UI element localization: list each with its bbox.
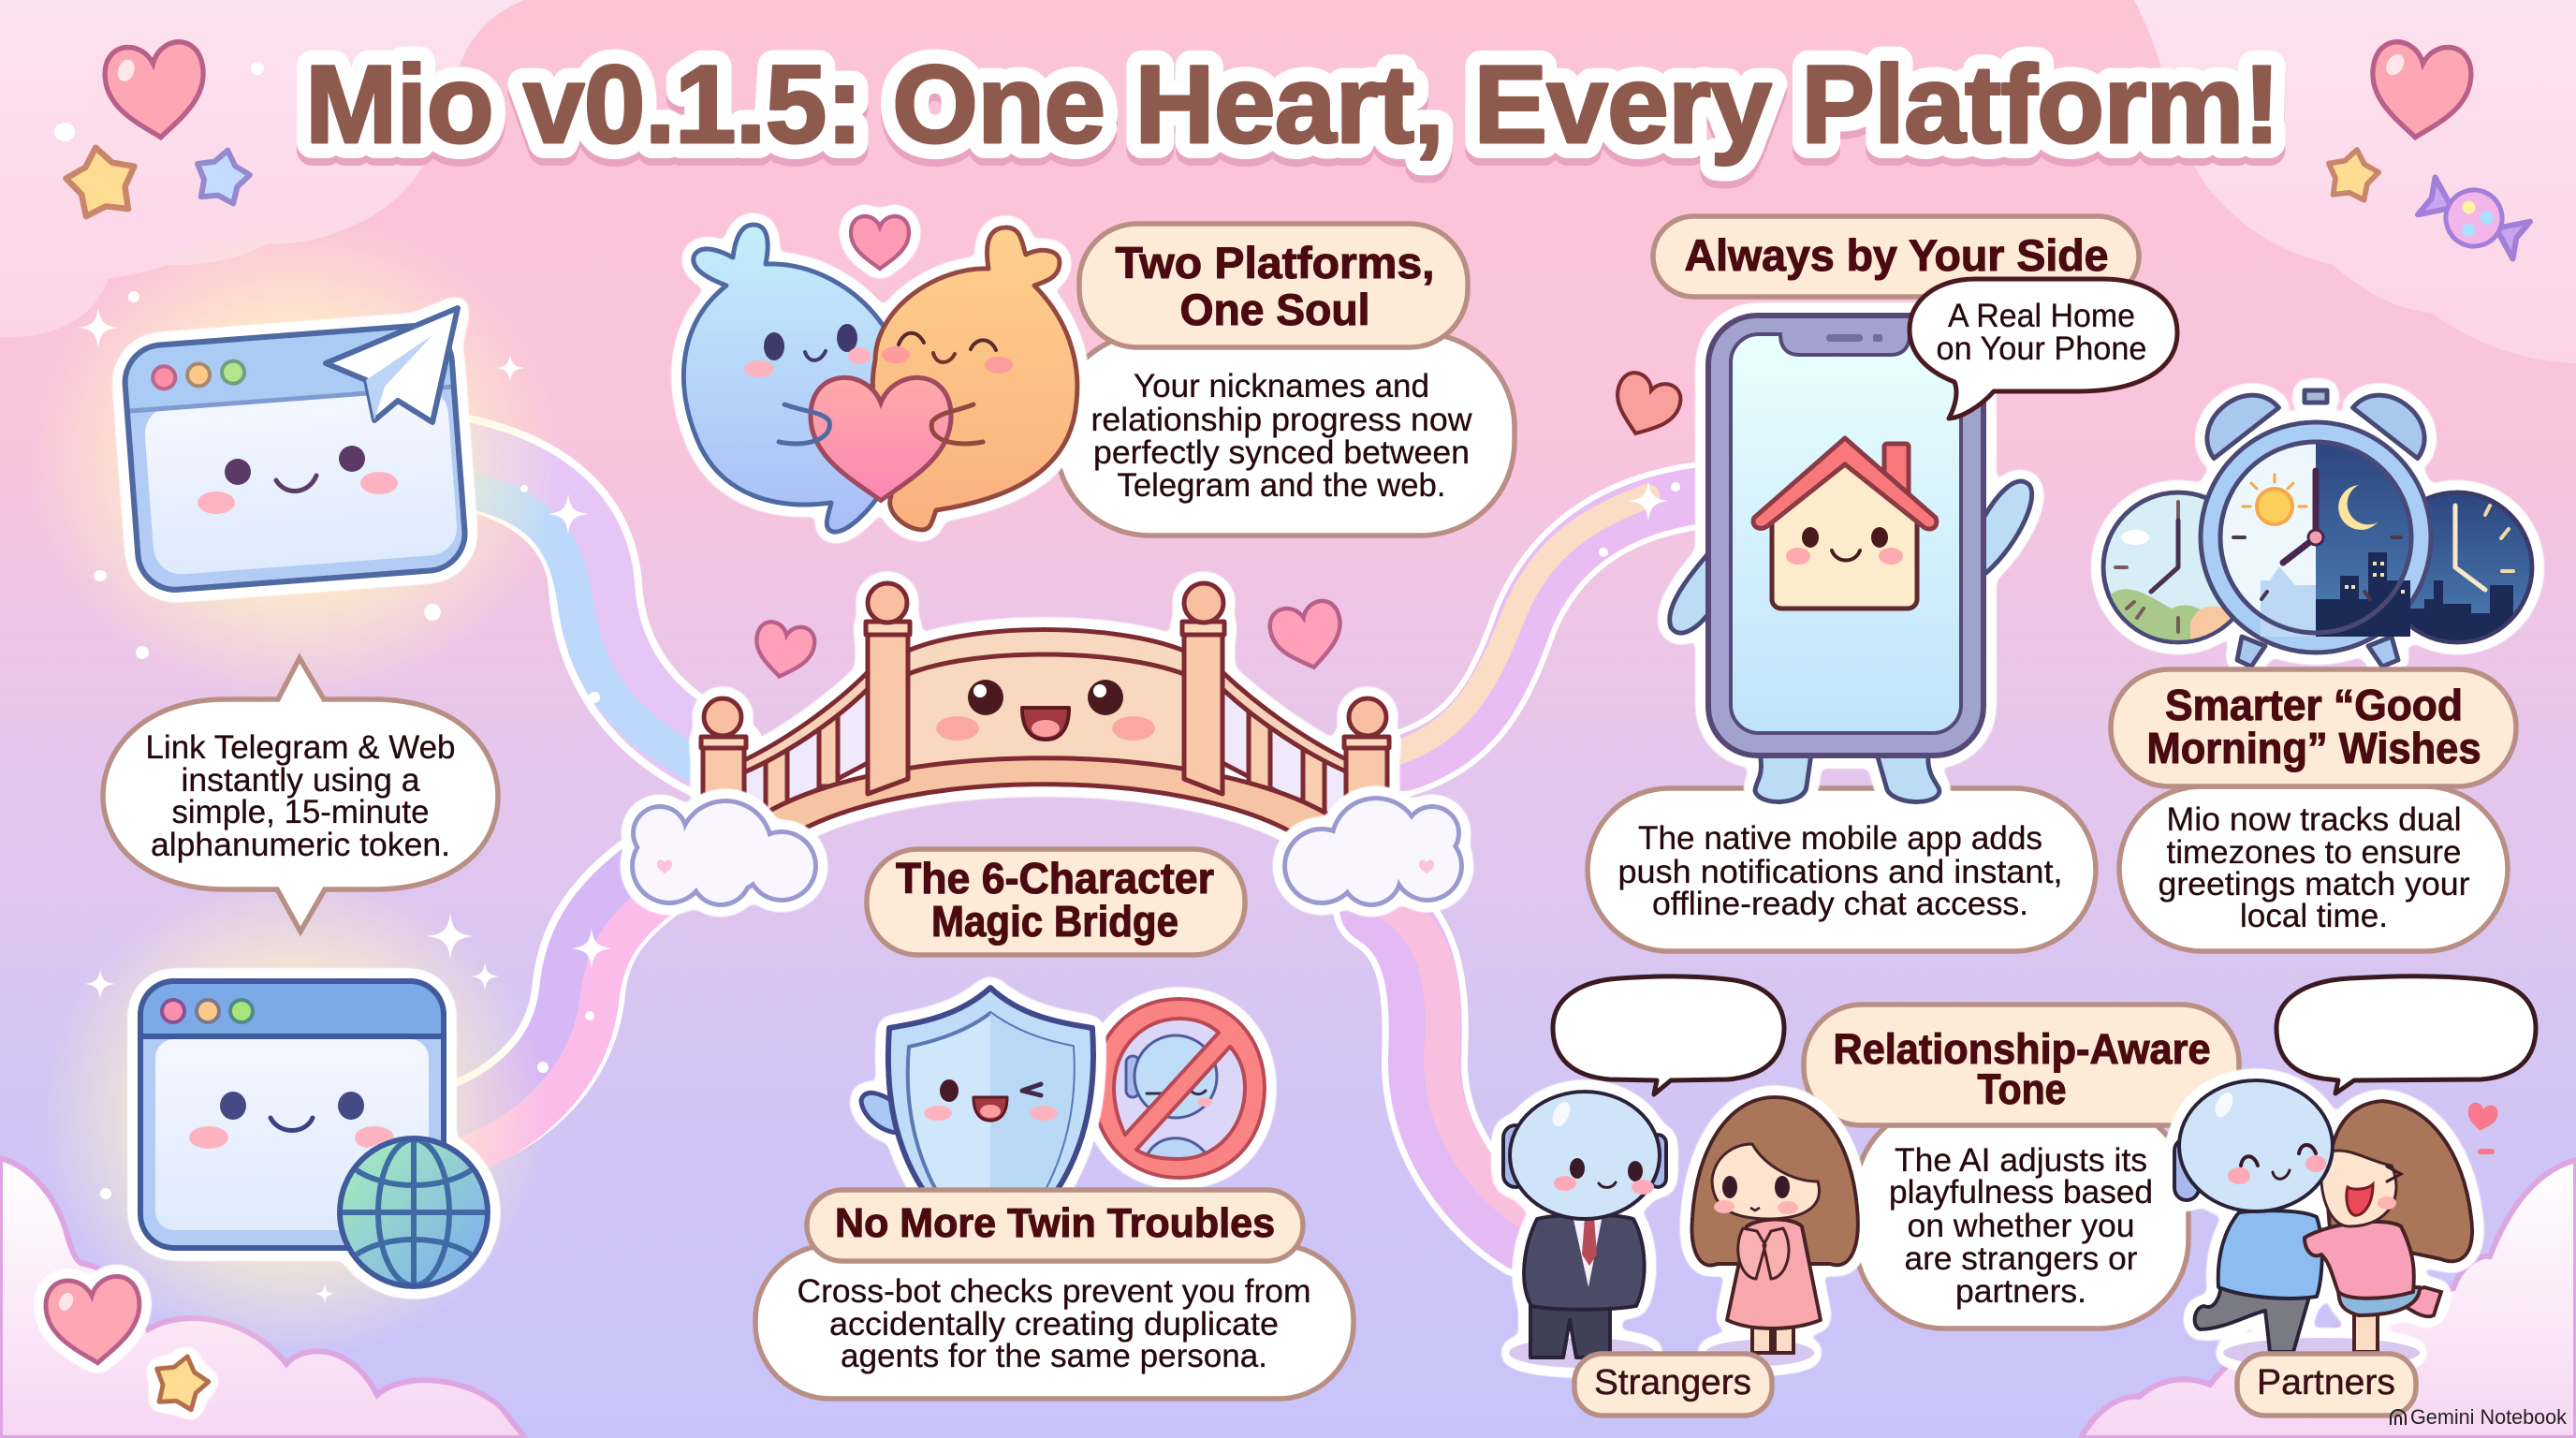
body text: partners. — [1955, 1273, 2086, 1310]
body text: accidentally creating duplicate — [829, 1306, 1279, 1343]
icon: heart left of phone — [1605, 369, 1685, 445]
cloud: top right — [2134, 0, 2576, 363]
panel: token callout — [103, 658, 498, 932]
illustration: bridge — [701, 583, 1389, 848]
label pill: strangers: Strangers — [1594, 1363, 1751, 1402]
body text: agents for the same persona. — [841, 1338, 1267, 1374]
body text — [1889, 1142, 2153, 1310]
headphones — [2174, 1138, 2199, 1200]
no sign — [1093, 999, 1265, 1178]
panel: web window — [140, 981, 488, 1286]
panel: relationship-aware tone — [1503, 976, 2536, 1416]
decorations: sparkles and dots — [54, 62, 1680, 1304]
heading: One Soul — [1179, 285, 1370, 334]
robot legs — [2195, 1287, 2312, 1352]
robot head — [2179, 1080, 2333, 1211]
callout bubble — [103, 658, 498, 932]
heading: Always by Your Side — [1685, 230, 2108, 280]
girl legs — [2354, 1297, 2378, 1352]
label pill: partners: Partners — [2257, 1363, 2395, 1402]
panel: magic bridge — [630, 583, 1464, 955]
shield face — [924, 1079, 1058, 1121]
panel: smarter good morning wishes — [2102, 380, 2532, 951]
illustration: shield and no-duplicate sign — [861, 988, 1265, 1217]
shield — [888, 988, 1093, 1217]
heading: Morning” Wishes — [2147, 724, 2481, 772]
speech bubble: strangers — [1553, 976, 1784, 1094]
heading — [2147, 681, 2481, 772]
body text — [1617, 820, 2063, 922]
title: Mio v0.1.5: One Heart, Every Platform! — [305, 43, 2280, 167]
night clock — [2382, 492, 2532, 646]
body text: greetings match your — [2159, 866, 2470, 902]
phone body — [1708, 315, 1983, 756]
inner posts — [868, 627, 1222, 794]
icon: heart top left — [102, 39, 210, 142]
icon: right cloud — [1282, 796, 1464, 907]
deck — [744, 758, 1348, 848]
ribbon: bridge to phone — [1395, 494, 1708, 763]
icon: yellow star top left — [62, 141, 141, 219]
body text: Mio now tracks dual — [2166, 801, 2462, 838]
icon: heart right of bridge — [1266, 598, 1348, 674]
icon: house — [1753, 438, 1937, 609]
left rail — [744, 672, 868, 772]
icon: small heart — [2465, 1101, 2499, 1134]
strangers girl face — [1714, 1176, 1798, 1214]
body bubble — [755, 1245, 1354, 1399]
girl dress — [2305, 1222, 2414, 1299]
robot body — [2218, 1211, 2322, 1299]
icon: left cloud — [630, 799, 818, 907]
girl shorts — [2338, 1287, 2420, 1315]
icon: star bottom left — [149, 1350, 213, 1412]
body text: relationship progress now — [1091, 402, 1472, 438]
body text: The AI adjusts its — [1895, 1142, 2147, 1179]
body bubble — [1855, 1105, 2188, 1328]
callout text: simple, 15-minute — [172, 794, 429, 830]
heading — [1833, 1025, 2211, 1113]
body text — [1091, 368, 1472, 504]
ribbon: web window to bridge — [459, 880, 660, 1153]
ribbon: telegram window to bridge — [463, 462, 721, 763]
panel: always by your side — [1588, 216, 2177, 951]
body text: perfectly synced between — [1093, 434, 1470, 471]
illustration: phone character — [1670, 315, 2032, 801]
small heart — [851, 216, 909, 269]
strangers robot face — [1554, 1158, 1654, 1195]
heading: Two Platforms, — [1116, 238, 1434, 287]
main clock — [2201, 422, 2431, 653]
body text: playfulness based — [1889, 1174, 2153, 1211]
right rail — [1222, 672, 1348, 772]
body text: Your nicknames and — [1134, 368, 1429, 404]
icon: web browser window — [140, 981, 488, 1286]
body text — [798, 1273, 1310, 1374]
heading pill — [1804, 1005, 2239, 1125]
soul faces — [744, 324, 1013, 444]
icon: heart top right — [2366, 39, 2474, 142]
body bubble — [1588, 788, 2096, 951]
icon: heart bottom left — [44, 1274, 144, 1367]
twin bot — [1126, 1035, 1217, 1168]
title: Mio v0.1.5: One Heart, Every Platform! — [305, 43, 2280, 167]
speech bubble: a real home — [1910, 279, 2177, 418]
speech bubble: partners — [2276, 976, 2536, 1093]
speech bubble: a real home: A Real Home — [1948, 298, 2135, 334]
illustration: two hugging souls — [683, 216, 1077, 532]
cloud: top left — [0, 0, 524, 337]
callout text: instantly using a — [182, 762, 420, 799]
illustration: dual timezone clocks — [2102, 380, 2532, 667]
panel: telegram window — [123, 308, 467, 593]
window face — [189, 1092, 394, 1149]
arms — [1670, 552, 1711, 633]
body text: Telegram and the web. — [1118, 467, 1445, 504]
panel: no more twin troubles — [755, 988, 1354, 1399]
bells and feet — [2192, 380, 2279, 459]
heading pill — [1653, 216, 2139, 297]
arch panel — [908, 629, 1184, 777]
illustration: strangers robot — [1503, 1092, 1666, 1368]
big heart — [811, 377, 951, 500]
callout text: alphanumeric token. — [151, 827, 450, 863]
heading: Tone — [1977, 1065, 2067, 1113]
body text: Cross-bot checks prevent you from — [798, 1273, 1310, 1310]
decorative dash — [2478, 1149, 2495, 1154]
body text: timezones to ensure — [2166, 834, 2462, 871]
day clock — [2102, 492, 2253, 646]
shield arm — [861, 988, 1093, 1217]
ribbon: bridge to robot — [1376, 903, 1535, 1236]
illustration: strangers girl — [1691, 1097, 1858, 1366]
girl face — [2321, 1151, 2396, 1226]
body bubble — [1056, 333, 1515, 536]
glow behind windows — [28, 215, 562, 1357]
icon: heart left of bridge — [751, 620, 817, 682]
orange soul — [872, 227, 1077, 530]
icon: blue star top left — [191, 145, 254, 206]
screen — [1731, 334, 1961, 733]
heading pill — [867, 849, 1245, 955]
speech bubble: a real home: on Your Phone — [1936, 330, 2147, 367]
icon: star top right — [2323, 145, 2382, 201]
heading: Magic Bridge — [931, 897, 1178, 946]
icon: paper plane — [326, 308, 458, 422]
body text: push notifications and instant, — [1617, 854, 2063, 890]
body text — [2159, 801, 2470, 934]
heading: No More Twin Troubles — [835, 1200, 1275, 1246]
heading: The 6-Character — [896, 854, 1214, 902]
body text: are strangers or — [1904, 1240, 2138, 1277]
legs — [1755, 754, 1811, 801]
heading: Relationship-Aware — [1833, 1025, 2211, 1073]
heading — [1116, 238, 1434, 334]
heading pill — [807, 1190, 1303, 1261]
heading pill — [2111, 669, 2516, 786]
body bubble — [2119, 786, 2508, 951]
railing gaps — [744, 689, 1348, 829]
girl hair — [2328, 1101, 2472, 1261]
icon: telegram browser window — [123, 308, 467, 593]
icon: candy — [2415, 170, 2533, 266]
panel: two platforms one soul — [683, 216, 1515, 536]
balusters — [766, 705, 1325, 816]
body text: on whether you — [1908, 1208, 2134, 1244]
heading: Smarter “Good — [2165, 681, 2463, 729]
callout text — [146, 729, 455, 863]
watermark: Gemini Notebook — [2410, 1405, 2568, 1429]
window face — [198, 446, 398, 514]
body text: offline-ready chat access. — [1652, 886, 2028, 922]
label pill: partners — [2237, 1354, 2416, 1416]
title: Mio v0.1.5: One Heart, Every Platform! — [305, 51, 2280, 174]
cloud: bottom right — [2081, 1160, 2576, 1438]
heading pill — [1079, 224, 1468, 347]
label pill: strangers — [1574, 1354, 1772, 1416]
body text: The native mobile app adds — [1638, 820, 2042, 857]
blue soul — [683, 225, 885, 532]
heading — [896, 854, 1214, 946]
outer posts — [703, 745, 1387, 829]
cloud: bottom left — [0, 1158, 525, 1438]
partners faces — [2228, 1145, 2401, 1215]
illustration: partners pair — [2174, 1080, 2472, 1368]
callout text: Link Telegram & Web — [146, 729, 455, 766]
body text: local time. — [2240, 898, 2388, 934]
bridge face — [936, 680, 1155, 741]
